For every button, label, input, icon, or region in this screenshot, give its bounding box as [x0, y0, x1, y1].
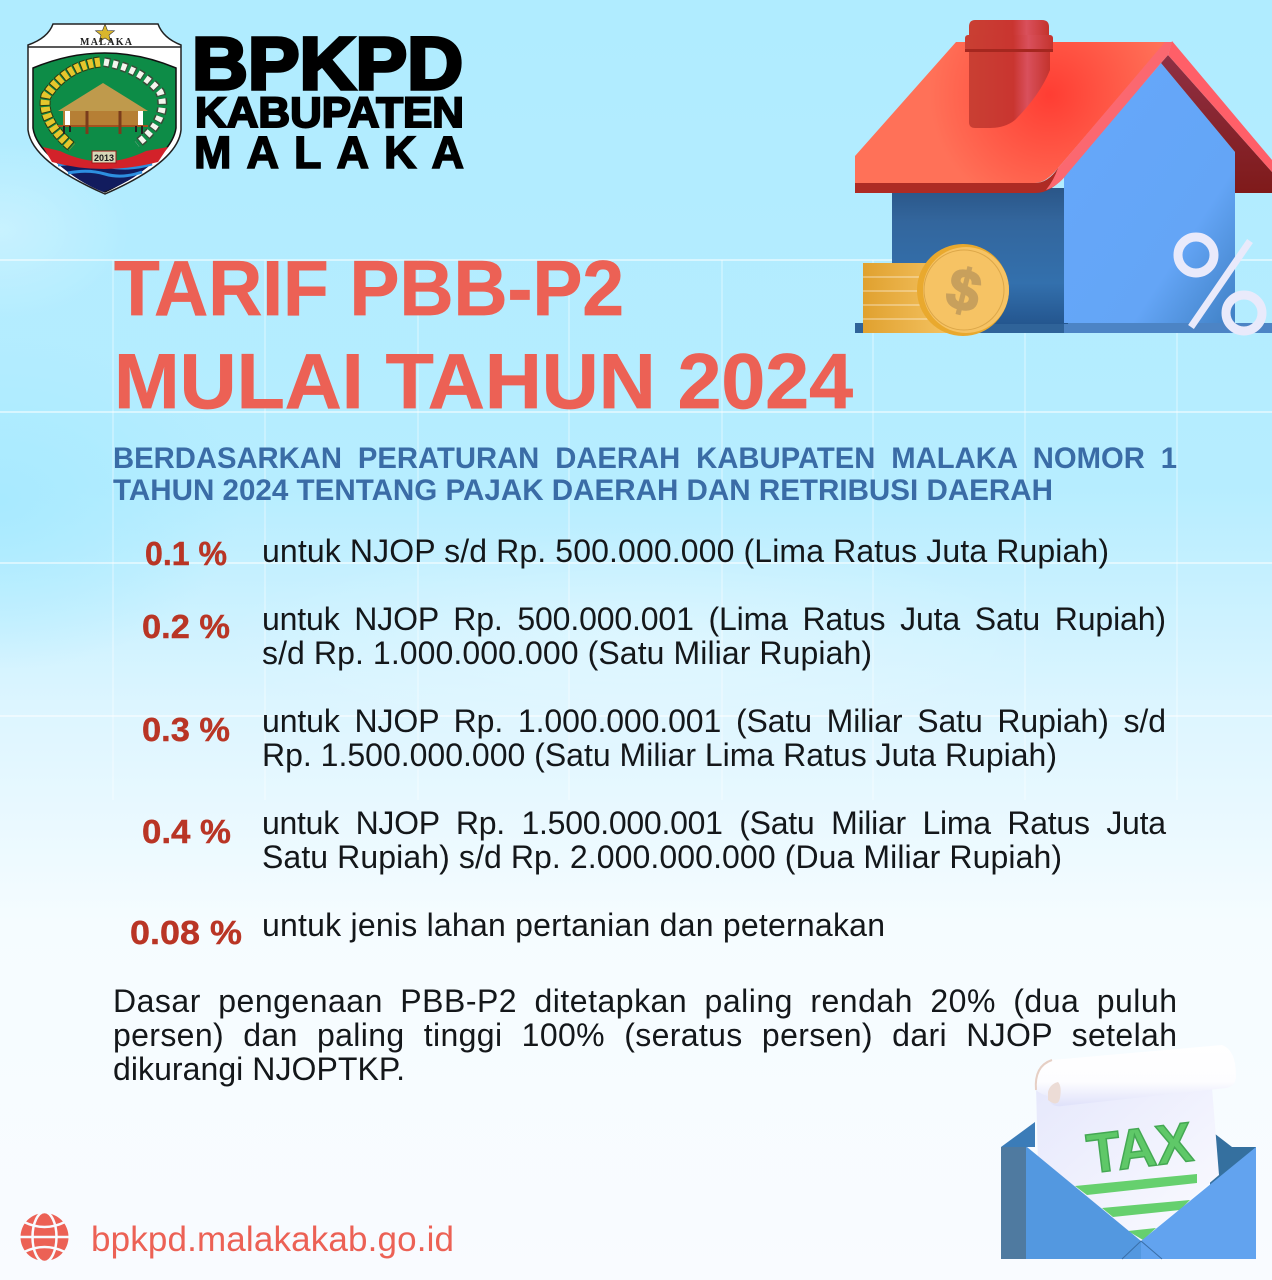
rate: 0.08 percent: untuk jenis lahan pertanian dan peternakan — [262, 907, 885, 943]
logo: Kabupaten Malaka crest — [28, 24, 181, 194]
rate: 0.3 percent: untuk NJOP Rp. 1.000.000.001 (Satu Miliar Satu Rupiah) s/d — [262, 703, 1166, 739]
rate: 0.4 percent: untuk NJOP Rp. 1.500.000.001 (Satu Miliar Lima Ratus Juta — [262, 805, 1166, 841]
closing paragraph: persen) dan paling tinggi 100% (seratus persen) dari NJOP setelah — [113, 1017, 1177, 1053]
subtitle: BERDASARKAN PERATURAN DAERAH KABUPATEN MALAKA NOMOR 1 — [113, 442, 1177, 475]
crest star — [96, 24, 114, 42]
envelope right flap — [1141, 1147, 1256, 1259]
coin stack — [863, 263, 953, 333]
envelope back right — [1210, 1130, 1256, 1190]
title — [114, 244, 853, 425]
coin — [917, 244, 1009, 336]
roof front — [855, 42, 1166, 183]
envelope left flap — [1001, 1147, 1141, 1259]
house right wall — [1064, 63, 1235, 323]
envelope back left — [1001, 1122, 1035, 1147]
closing paragraph: dikurangi NJOPTKP. — [113, 1051, 405, 1087]
organisation name: KABUPATEN — [195, 89, 464, 137]
rate: 0.4 percent: Satu Rupiah) s/d Rp. 2.000.000.000 (Dua Miliar Rupiah) — [262, 839, 1062, 875]
crest name: MALAKA — [80, 37, 133, 48]
closing paragraph — [113, 983, 1177, 1087]
rate: 0.1 percent: 0.1 % — [145, 535, 227, 572]
rate: 0.1 percent: untuk NJOP s/d Rp. 500.000.000 (Lima Ratus Juta Rupiah) — [262, 533, 1109, 569]
crest house — [58, 83, 148, 111]
TAX label: TAX — [1083, 1110, 1196, 1185]
rate: 0.4 percent: 0.4 % — [142, 813, 231, 850]
title: MULAI TAHUN 2024 — [114, 337, 853, 425]
chimney — [969, 51, 1050, 128]
crest green field — [33, 53, 176, 192]
illustration: house with coins and percent — [855, 20, 1272, 336]
rate: 0.3 percent — [142, 703, 1166, 773]
logo: Kabupaten Malaka crest: 2013 — [94, 153, 114, 163]
percent sign — [1178, 237, 1262, 331]
website footer — [20, 1212, 454, 1262]
roof lip — [855, 168, 1066, 193]
paper lines — [1075, 1174, 1197, 1240]
paper roll — [1036, 1045, 1236, 1106]
crest shield outline — [28, 24, 181, 194]
house base — [855, 323, 1272, 333]
house left wall — [892, 188, 1068, 324]
tax paper — [1036, 1085, 1219, 1241]
organisation name — [192, 22, 464, 178]
illustration: house with coins and percent: $ — [940, 255, 987, 326]
crest rice wreath — [45, 62, 100, 147]
website address: bpkpd.malakakab.go.id — [91, 1220, 454, 1259]
crest cotton wreath — [104, 62, 162, 144]
rate: 0.08 percent: 0.08 % — [130, 914, 242, 951]
organisation name: MALAKA — [194, 127, 464, 178]
rate: 0.2 percent — [142, 601, 1166, 671]
rate: 0.3 percent: Rp. 1.500.000.000 (Satu Miliar Lima Ratus Juta Rupiah) — [262, 737, 1057, 773]
subtitle — [113, 442, 1177, 507]
rate: 0.3 percent: 0.3 % — [142, 711, 230, 748]
rate: 0.4 percent — [142, 805, 1166, 875]
title: TARIF PBB-P2 — [114, 244, 624, 332]
icon: globe — [20, 1212, 69, 1262]
rate: 0.08 percent — [130, 907, 885, 951]
organisation name: BPKPD — [192, 22, 463, 105]
roof edge stripe — [1046, 42, 1172, 190]
crest water — [57, 163, 152, 192]
closing paragraph: Dasar pengenaan PBB-P2 ditetapkan paling rendah 20% (dua puluh — [113, 983, 1177, 1019]
roof gable — [1161, 55, 1272, 193]
rate: 0.2 percent: 0.2 % — [142, 608, 230, 645]
rate: 0.2 percent: untuk NJOP Rp. 500.000.001 (Lima Ratus Juta Satu Rupiah) — [262, 601, 1166, 637]
illustration: tax envelope — [1001, 1045, 1256, 1259]
rate: 0.2 percent: s/d Rp. 1.000.000.000 (Satu Miliar Rupiah) — [262, 635, 872, 671]
crest ribbon — [43, 147, 168, 169]
subtitle: TAHUN 2024 TENTANG PAJAK DAERAH DAN RETRIBUSI DAERAH — [113, 474, 1053, 507]
